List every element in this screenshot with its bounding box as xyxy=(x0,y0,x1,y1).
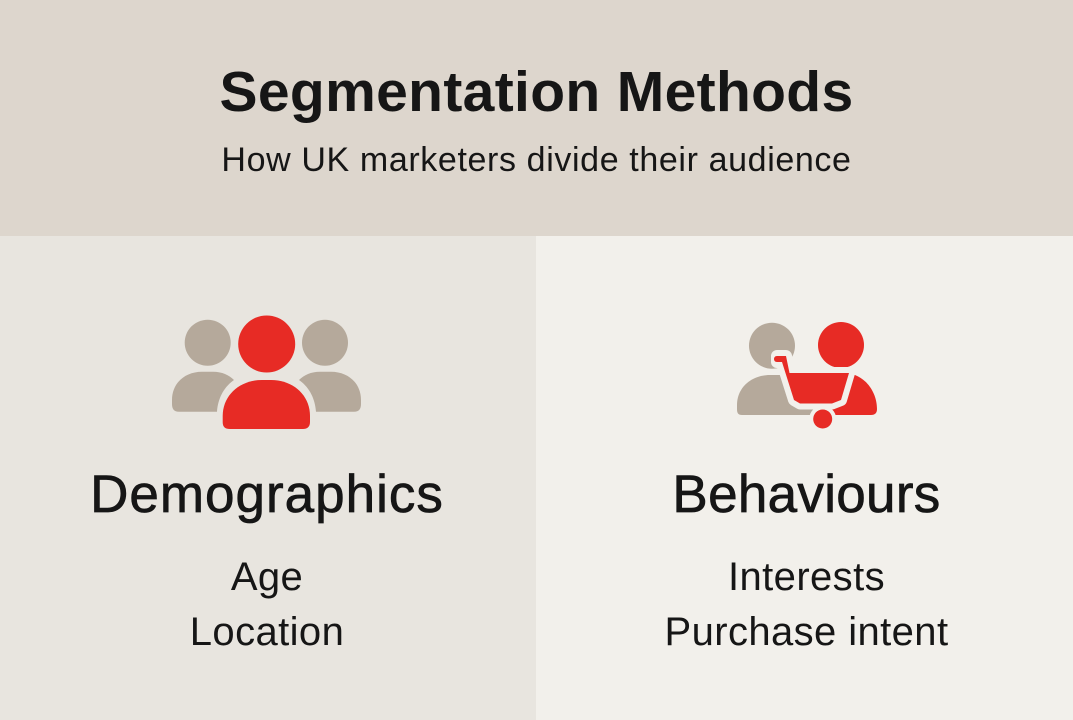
panel: demographics xyxy=(0,236,536,720)
title: Segmentation Methods xyxy=(219,60,854,124)
icon: people with shopping cart xyxy=(737,322,877,428)
list: demographics items xyxy=(190,555,344,654)
list: demographics items: Location xyxy=(190,610,344,654)
icon: group of people xyxy=(172,316,361,429)
heading: demographics: Demographics xyxy=(90,465,444,524)
header band xyxy=(0,0,1073,236)
subtitle: How UK marketers divide their audience xyxy=(221,141,852,179)
list: behaviours items: Purchase intent xyxy=(665,610,948,654)
panel: behaviours xyxy=(536,236,1073,720)
list: demographics items: Age xyxy=(231,555,303,599)
heading: behaviours: Behaviours xyxy=(672,465,941,524)
list: behaviours items xyxy=(665,555,948,654)
list: behaviours items: Interests xyxy=(728,555,885,599)
